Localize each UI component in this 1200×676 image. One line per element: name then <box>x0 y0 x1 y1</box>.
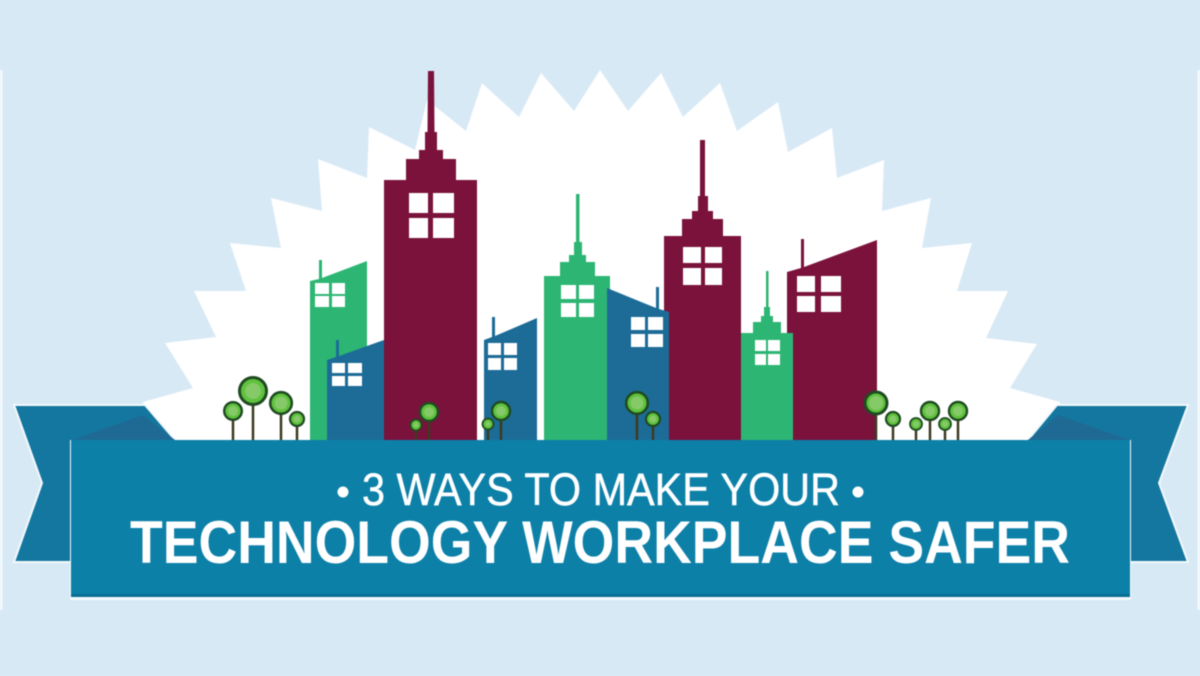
building: right blue <box>607 287 669 440</box>
title <box>130 464 1070 576</box>
building: right maroon <box>787 239 877 440</box>
ribbon: right tail <box>1028 405 1188 562</box>
ribbon: main band <box>70 440 1131 600</box>
building: tall maroon tower <box>384 71 477 440</box>
title line 2: TECHNOLOGY WORKPLACE SAFER <box>130 509 1070 576</box>
building: middle blue <box>484 317 537 440</box>
title line 1: 3 WAYS TO MAKE YOUR <box>362 464 840 515</box>
building: small green tower <box>741 271 793 440</box>
sunburst background <box>143 70 1060 445</box>
building: middle maroon tower <box>664 140 741 440</box>
trees <box>224 378 967 440</box>
building: center green tower <box>544 194 610 440</box>
ribbon: left tail <box>14 405 175 562</box>
building: left green <box>310 260 367 440</box>
skyline <box>310 71 877 440</box>
building: left blue <box>327 340 384 440</box>
